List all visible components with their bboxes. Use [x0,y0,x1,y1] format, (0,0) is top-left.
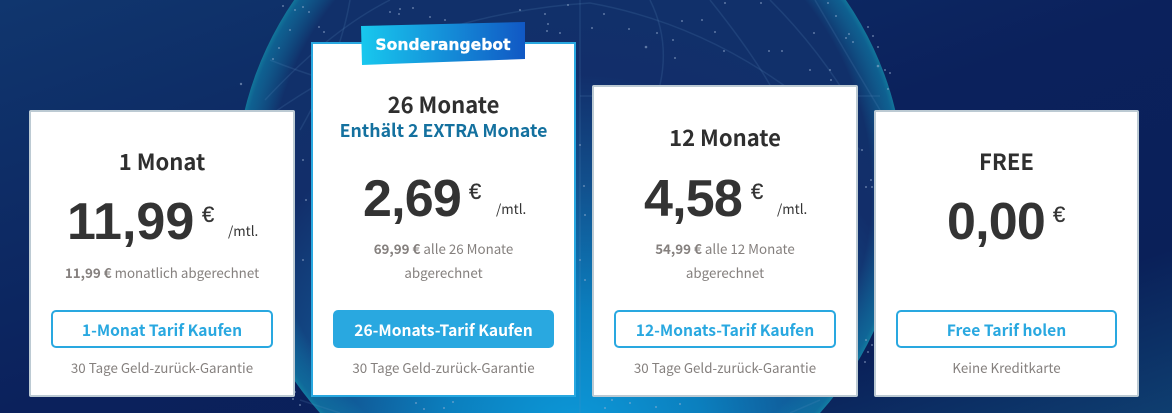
button: 1-Monat Tarif Kaufen [82,319,242,341]
currency: € [1053,202,1065,227]
per month: /mtl. [228,220,258,240]
currency: € [202,202,214,227]
billing note [655,239,795,282]
guarantee: 30 Tage Geld-zurück-Garantie [352,358,535,377]
button: 12-Monats-Tarif Kaufen [636,319,814,341]
heading: 12 Monate: 12 Monate [669,121,781,153]
panel: FREE [874,110,1139,397]
heading: FREE: FREE [979,145,1034,177]
billing note: 11,99 € monatlich abgerechnet [65,263,259,282]
button [614,310,836,348]
per month: /mtl. [777,198,807,218]
per month: /mtl. [496,198,526,218]
subheading: Enthält 2 EXTRA Monate [340,117,547,143]
billing note: 69,99 € alle 26 Monate [374,239,513,258]
button [896,310,1117,348]
panel: 26 Monate [311,42,576,397]
price: 4,58: 4,58 [644,170,742,228]
billing note: abgerechnet [686,263,764,282]
billing note: 54,99 € alle 12 Monate [655,239,795,258]
guarantee: 30 Tage Geld-zurück-Garantie [634,358,816,377]
button: Free Tarif holen [947,319,1066,341]
panel: 1 Monat [29,110,295,397]
billing note [374,239,513,282]
price: 2,69: 2,69 [363,170,461,228]
ribbon: Sonderangebot: Sonderangebot [375,36,511,54]
panel: 12 Monate [592,85,858,397]
ribbon: Sonderangebot [361,22,525,65]
guarantee: 30 Tage Geld-zurück-Garantie [71,358,253,377]
guarantee: Keine Kreditkarte [952,358,1061,377]
heading: 1 Monat: 1 Monat [119,145,205,177]
button [333,310,554,348]
billing note: abgerechnet [404,263,483,282]
currency: € [469,179,481,204]
currency: € [751,179,763,204]
button [51,310,273,348]
heading: 26 Monate: 26 Monate [388,88,499,120]
button: 26-Monats-Tarif Kaufen [354,319,533,341]
price: 0,00: 0,00 [947,193,1045,251]
price: 11,99: 11,99 [67,193,194,251]
